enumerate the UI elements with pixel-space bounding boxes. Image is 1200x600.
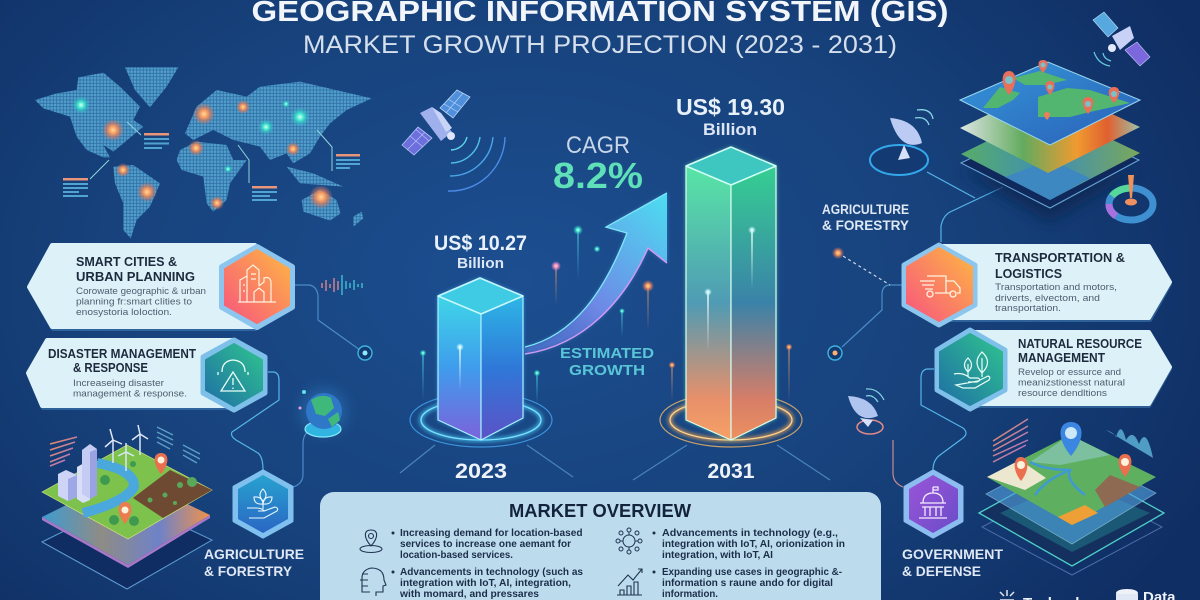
bullets column 1: Increasing demand for location-based [400,528,582,539]
heading: DISASTER MANAGEMENT [48,347,196,361]
heading: MARKET OVERVIEW [509,501,691,521]
bullets column 1: with momard, and pressares [399,589,539,600]
ground layer [42,445,212,539]
bar: 2023 [438,278,523,440]
description: Corowate geographic & urban [76,286,206,297]
data stripes [993,419,1028,462]
panel: natural resource: resource dendltions [1018,388,1107,399]
description: Transportation and motors, [995,282,1117,293]
top map [987,435,1156,525]
map leader lines and data labels [90,122,332,183]
illustration: isometric map bottom right [979,419,1164,575]
bullets column 2: integration, with IoT, AI [662,550,773,561]
label: CAGR [553,132,643,196]
label: 2023 value [434,232,527,272]
illustration: isometric city map bottom left [42,425,212,589]
bullets column 2: information s raune ando for digital [662,578,833,589]
bullets column 2: Expanding use cases in geographic &- [662,567,842,578]
heading: NATURAL RESOURCE [1018,337,1142,351]
label: CAGR: 8.2% [553,155,643,196]
label: 2023: 2023 [455,460,507,483]
panel: disaster management: & RESPONSE [73,361,148,375]
icon: AI head [360,568,386,596]
third layer [979,462,1164,566]
label: estimated growth: ESTIMATED [560,345,654,362]
icon: leaf hexagon [937,330,1005,409]
wind turbines [105,425,148,471]
bullets column 1: integration with IoT, AI, integration, [400,578,571,589]
label: agriculture right [822,202,909,233]
world map [35,67,372,238]
layer 2 [960,85,1140,173]
panel: smart cities [29,245,292,329]
node: equalizer marker [322,275,362,295]
description: Increaseing disaster [73,378,164,389]
bullets column 1: services to increase one aemant for [400,539,571,550]
icon: agriculture hexagon [234,471,292,537]
trees [100,461,139,526]
logo: data [1116,589,1176,600]
panel: transportation: LOGISTICS [995,267,1062,281]
bullets column 2: information. [662,589,718,600]
label: 2031: 2031 [708,460,755,483]
node: cyan ring [358,346,372,360]
satellite: centre [402,90,505,191]
pins [1015,422,1131,481]
layer 1 [960,62,1140,145]
label: government: GOVERNMENT [902,546,1003,562]
panel: transportation: transportation. [995,303,1061,314]
river [83,463,134,513]
node: orange ring [828,346,842,360]
label: government: & DEFENSE [902,563,981,579]
panel: market overview [320,492,881,600]
label: agriculture left: AGRICULTURE [204,546,304,562]
panel: smart cities: enosystoria loIoction. [76,307,172,318]
bar: 2031 [686,147,776,440]
bullets column 1 [392,528,583,600]
description: Revelop or essurce and [1018,367,1121,378]
bullets column 2 [652,528,845,600]
label: agriculture left [204,546,304,579]
signal arcs [448,137,505,191]
label: 2023 value: Billion [457,255,504,272]
label: 2023 value: US$ 10.27 [434,232,527,255]
node: orange dot [832,247,844,259]
icon: dish lower right [848,389,884,434]
map callout bars [63,133,360,201]
outline layer [42,500,212,589]
map hotspots [72,96,333,210]
spike chart [1106,429,1153,458]
panel: natural resource: MANAGEMENT [1018,351,1105,365]
panel: smart cities: URBAN PLANNING [76,270,195,284]
pins [119,453,167,524]
lower outline [982,480,1162,575]
connector lines [232,172,1003,487]
bullets column 2: integration with IoT, AI, orionization in [662,539,845,550]
heading: TRANSPORTATION & [995,251,1125,265]
icon: globe [298,388,347,437]
icon: government hexagon [905,471,962,537]
icon: AI network [616,528,642,554]
label: agriculture left: & FORESTRY [204,563,293,579]
ring: 2031 [660,393,802,447]
chart: market growth bars [410,147,802,447]
label: agriculture right: & FORESTRY [822,218,909,233]
label: estimated growth [560,345,654,379]
label: 2031 value [676,94,785,139]
second layer [986,450,1156,544]
label: 2031 value: Billion [703,120,757,139]
bullets column 1: Advancements in technology (such as [400,567,583,578]
satellite: top right [1093,12,1150,66]
label: 2031 value: US$ 19.30 [676,94,785,120]
logo: technology [1000,590,1107,600]
label: government [902,546,1003,579]
panel: disaster management: management & response. [73,388,187,400]
ring: 2023 [410,393,552,447]
illustration: GIS map layers top right [960,60,1140,222]
bullets column 2: Advancements in technology (e.g., [662,528,838,539]
label: estimated growth: GROWTH [569,362,645,379]
panel: natural resource: meanizstionesst natural [1018,378,1125,388]
layer 4 outline [961,120,1139,208]
particles [420,225,792,403]
land masses [983,71,1130,117]
buildings [58,444,97,503]
layer 3 [961,110,1140,200]
label: agriculture right: AGRICULTURE [822,202,909,217]
heading: SMART CITIES & [76,255,177,269]
icon: dish top right [870,110,933,175]
panel: transportation [904,245,1170,325]
label: CAGR: CAGR [566,132,630,159]
field [133,470,212,518]
icon: truck hexagon [904,245,975,325]
data stripes [50,427,200,466]
earth layer [42,475,210,565]
icon: location pin [360,530,382,552]
icon: disaster hexagon [203,340,265,410]
icon: smart city hexagon [222,247,292,327]
panel: disaster management [28,340,265,410]
icon: location donut [1109,175,1153,220]
arrow: growth [525,193,667,354]
panel: natural resource [937,330,1170,409]
bullets column 1: location-based services. [400,550,513,561]
panel: smart cities: planning fr:smart cIities to [76,296,192,308]
map pins [1003,60,1119,120]
subtitle: MARKET GROWTH PROJECTION (2023 - 2031) [303,31,897,59]
icon: growth chart [617,569,642,595]
glow sticks in bars [456,226,756,390]
panel: transportation: driverts, elvectom, and [995,293,1100,304]
